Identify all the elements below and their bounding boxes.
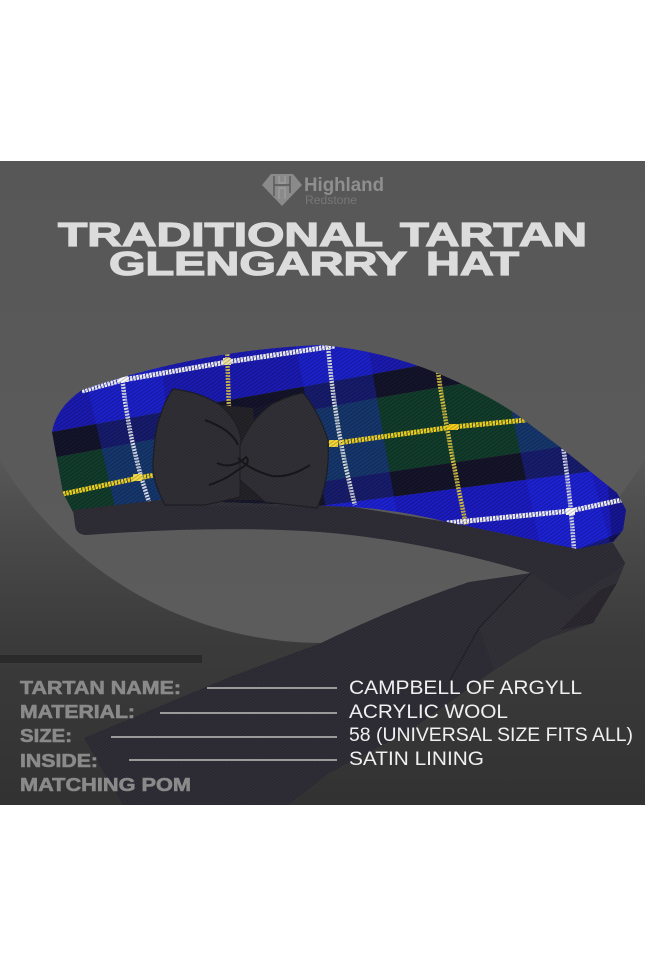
right dark edge (608, 486, 626, 542)
spec labels: INSIDE: (20, 751, 98, 771)
title: GLENGARRY (109, 245, 407, 282)
logo: Highland Redstone (262, 174, 384, 207)
stripe crossings (119, 358, 575, 515)
tartan columns (78, 335, 612, 550)
twill texture (52, 345, 626, 549)
spec values: CAMPBELL OF ARGYLL (349, 678, 582, 699)
title (58, 216, 587, 282)
infographic canvas (0, 161, 645, 805)
title: HAT (426, 245, 519, 282)
hat strap tails (84, 543, 625, 805)
bow (153, 389, 328, 508)
vertical stripes (122, 345, 574, 550)
logo: Highland Redstone: Redstone (305, 193, 357, 207)
spec labels: SIZE: (20, 726, 72, 746)
spec labels: TARTAN NAME: (20, 678, 181, 698)
spec values: ACRYLIC WOOL (349, 702, 508, 723)
panel: background (0, 161, 645, 805)
hat fabric: tartan crown (52, 345, 626, 549)
spec values: 58 (UNIVERSAL SIZE FITS ALL) (349, 725, 633, 746)
title: TARTAN (400, 216, 587, 253)
spec labels (20, 678, 191, 795)
title: TRADITIONAL (58, 216, 383, 253)
spec labels: MATCHING POM (20, 775, 191, 795)
hat band (73, 500, 625, 600)
spec labels: MATERIAL: (20, 702, 135, 722)
spec values (349, 678, 633, 770)
connector lines (111, 688, 337, 760)
horizontal stripes (63, 346, 626, 523)
tartan rows (52, 345, 626, 549)
spec values: SATIN LINING (349, 749, 484, 770)
bow knot (205, 420, 310, 485)
logo: Highland Redstone: Highland (304, 175, 384, 196)
